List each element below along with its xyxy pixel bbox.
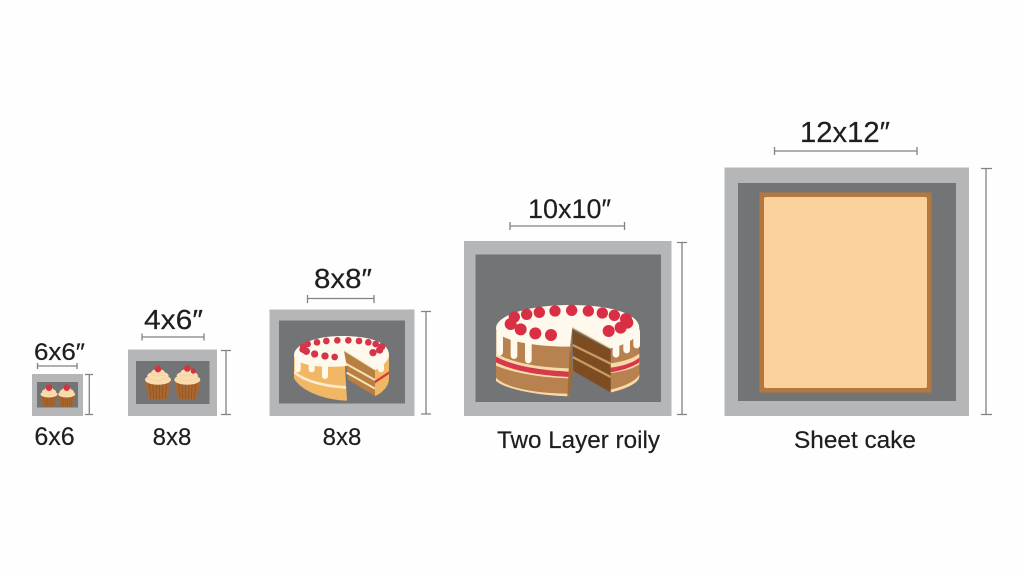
width dimension 4x6 — [142, 334, 204, 340]
width dimension 6x6 — [38, 363, 77, 369]
size heading 6x6: 6x6″ — [34, 339, 86, 366]
pan interior 12x12 — [738, 183, 956, 401]
size heading 4x6: 4x6″ — [144, 304, 203, 335]
width dimension 10x10 — [510, 222, 624, 230]
panel: 6x6 cupcakes — [32, 339, 93, 451]
size heading 12x12: 12x12″ — [800, 117, 890, 149]
height dimension 4x6 — [221, 350, 231, 414]
size heading 10x10: 10x10″ — [528, 194, 611, 224]
pan frame 10x10 — [464, 241, 672, 416]
height dimension 12x12 — [981, 168, 992, 414]
pan frame 4x6 — [128, 350, 217, 416]
height dimension 6x6 — [85, 374, 93, 414]
icon: two layer cake — [496, 305, 639, 396]
pan interior 4x6 — [136, 361, 210, 404]
panel: 8x8 cupcakes — [128, 304, 231, 451]
caption 6x6: 6x6 — [34, 423, 75, 451]
icon: sheet cake crust — [760, 192, 932, 392]
panel: sheet cake — [724, 117, 992, 454]
caption 8x8: 8x8 — [153, 424, 191, 451]
icon: cupcake right — [174, 365, 200, 399]
height dimension 10x10 — [677, 242, 687, 414]
width dimension 8x8 — [308, 295, 374, 303]
icon: small cupcake right — [58, 384, 75, 407]
icon: light layer cake — [294, 336, 389, 401]
pan frame 8x8 — [270, 310, 414, 416]
size heading 8x8: 8x8″ — [314, 263, 372, 294]
icon: cupcake left — [145, 366, 171, 399]
panel: two layer cake — [464, 194, 687, 454]
icon: sheet cake top — [764, 197, 927, 388]
caption two layer: Two Layer roily — [497, 427, 660, 454]
pan frame 6x6 — [32, 374, 83, 416]
pan interior 10x10 — [476, 254, 661, 402]
width dimension 12x12 — [774, 147, 917, 155]
pan frame 12x12 — [724, 168, 969, 416]
height dimension 8x8 — [421, 312, 431, 414]
icon: small cupcake left — [41, 384, 57, 407]
pan interior 6x6 — [37, 382, 78, 408]
panel: 8x8 cake — [270, 263, 431, 451]
caption sheet cake: Sheet cake — [794, 427, 916, 454]
caption 8x8 cake: 8x8 — [323, 424, 361, 451]
pan interior 8x8 — [279, 320, 405, 404]
